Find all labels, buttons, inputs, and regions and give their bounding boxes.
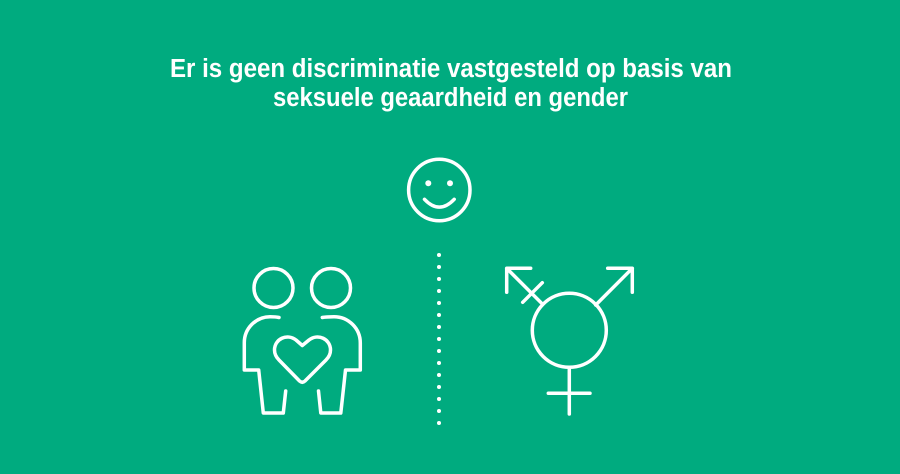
icon: smiley <box>409 159 470 221</box>
title: Er is geen discriminatie vastgesteld op basis van <box>170 55 732 83</box>
icon: transgender symbol <box>507 268 632 414</box>
icon: couple with heart <box>244 268 360 413</box>
title <box>170 55 732 112</box>
dotted divider <box>437 253 441 425</box>
title: seksuele geaardheid en gender <box>273 84 628 112</box>
